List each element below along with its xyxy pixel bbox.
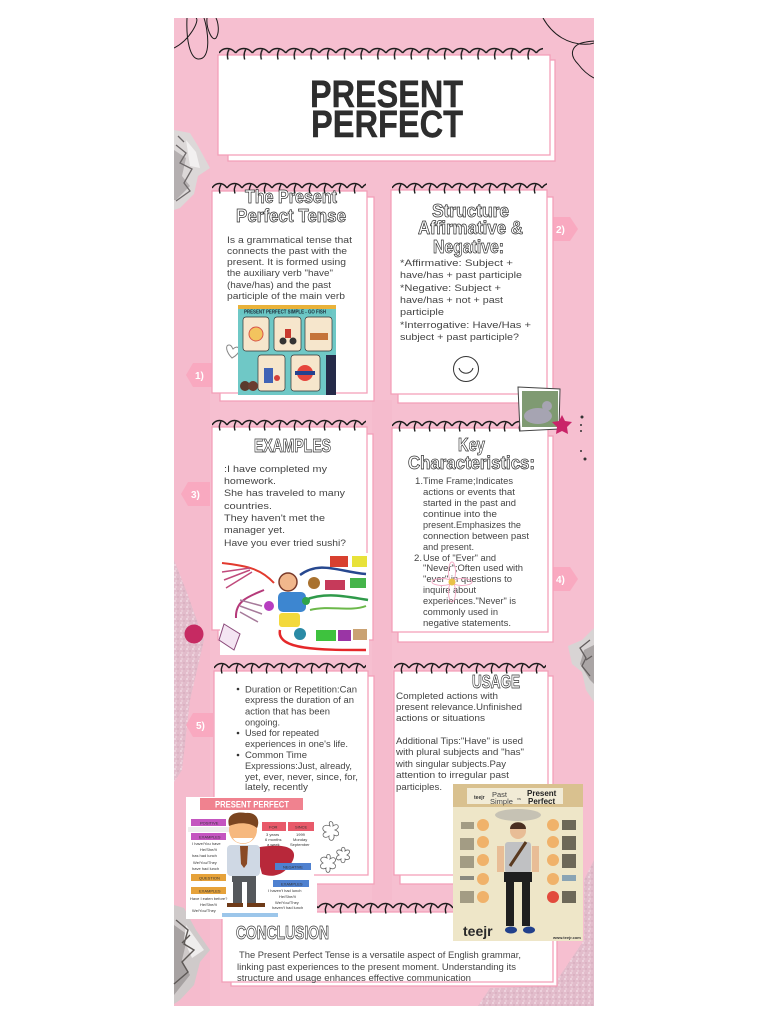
- text: definition: (have/has) and the past: [227, 280, 331, 291]
- text: example sentences: homework.: [224, 476, 276, 487]
- heading: key characteristics: Key: [458, 435, 485, 455]
- text: characteristics list: started in the past and: [423, 498, 516, 509]
- icon: smiley: [454, 356, 478, 382]
- tag: step 2: [547, 217, 578, 241]
- image: past simple vs present perfect chart: [453, 784, 583, 941]
- image: present perfect superhero chart: 3 years: [266, 832, 279, 837]
- tag: step 4: 4): [556, 575, 565, 586]
- text: duration bullets: yet, ever, never, since, for,: [245, 772, 358, 783]
- text: usage notes: [395, 691, 524, 793]
- text: characteristics list: and present.: [423, 542, 474, 553]
- image: present perfect superhero chart: a week: [267, 842, 280, 847]
- text: structure rules: have/has + not + past: [400, 295, 503, 306]
- text: definition: Is a grammatical tense that: [227, 235, 352, 246]
- image: present perfect superhero chart: 6 months: [265, 837, 281, 842]
- image: past simple vs present perfect chart: www.teejr.com: [552, 935, 581, 940]
- text: characteristics list: 1.: [415, 476, 423, 487]
- image: present perfect superhero chart: haven't had lunch: [272, 905, 303, 910]
- image: past simple vs present perfect chart: Past: [492, 790, 508, 799]
- panel: conclusion: [222, 902, 557, 986]
- tag: step 1: [186, 363, 212, 387]
- image: go fish game board: [238, 305, 336, 395]
- image: present perfect superhero chart: We/You/They: [192, 908, 216, 913]
- text: example sentences: countries.: [224, 501, 272, 512]
- text: duration bullets: Expressions:Just, already,: [245, 761, 352, 772]
- image: past simple vs present perfect chart: Present: [527, 789, 557, 798]
- image: past simple vs present perfect chart: vs: [517, 796, 521, 801]
- crumpled paper: lower left: [174, 905, 210, 1004]
- text: characteristics list: [414, 476, 529, 629]
- image: go fish game board: PRESENT PERFECT SIMPLE - GO FISH: [244, 310, 326, 316]
- coil binding: panel 2: [392, 182, 547, 195]
- text: example sentences: manager yet.: [224, 525, 285, 536]
- image: mind map: [219, 553, 369, 655]
- image: present perfect superhero chart: I haven't had lunch: [268, 888, 301, 893]
- text: conclusion body: The Present Perfect Tense is a versatile aspect of English grammar,: [239, 950, 521, 961]
- text: characteristics list: continue into the: [423, 509, 497, 520]
- panel: title card: [218, 47, 555, 161]
- coil binding: conclusion: [228, 902, 468, 915]
- image: past simple vs present perfect chart: Perfect: [528, 797, 555, 806]
- text: structure rules: *Affirmative: Subject +: [400, 258, 513, 269]
- icon: outlined flowers: [320, 822, 350, 872]
- text: duration bullets: Common Time: [245, 750, 307, 761]
- coil binding: panel 5: [214, 662, 366, 675]
- text: characteristics list: Use of "Ever" and: [423, 553, 496, 564]
- heading: the present perfect tense: Perfect Tense: [236, 206, 346, 226]
- image: past simple vs present perfect chart: teejr: [463, 923, 493, 939]
- image: present perfect superhero chart: EXAMPLES: [199, 888, 221, 894]
- tag: step 4: [547, 567, 578, 591]
- panel: examples: [212, 419, 373, 655]
- text: usage notes: Completed actions with: [396, 691, 498, 702]
- image: present perfect superhero chart: FOR: [269, 824, 278, 830]
- heading: examples: EXAMPLES: [254, 436, 331, 456]
- crumpled paper: upper left: [174, 130, 210, 210]
- text: definition: the auxiliary verb "have": [227, 268, 333, 279]
- text: definition: [227, 235, 352, 302]
- text: example sentences: :I have completed my: [224, 464, 327, 475]
- text: definition: participle of the main verb: [227, 291, 345, 302]
- tag: step 3: 3): [191, 490, 200, 501]
- image: present perfect superhero chart: PRESENT PERFECT: [215, 800, 289, 810]
- heading: usage: USAGE: [472, 672, 520, 692]
- image: present perfect superhero chart: NEGATIVE: [283, 864, 303, 870]
- panel: the present perfect tense: [212, 182, 374, 401]
- text: characteristics list: "Never";Often used with: [423, 563, 523, 574]
- text: characteristics list: negative statements.: [423, 618, 511, 629]
- text: example sentences: She has traveled to many: [224, 488, 345, 499]
- crumpled paper: right: [568, 628, 594, 702]
- image: present perfect superhero chart: Have I eaten before?: [190, 896, 228, 901]
- heading: structure: Affirmative &: [418, 218, 523, 238]
- text: usage notes: actions or situations: [396, 713, 485, 724]
- text: duration bullets: experiences in one's life.: [245, 739, 348, 750]
- text: structure rules: [400, 258, 531, 343]
- text: usage notes: participles.: [396, 782, 442, 793]
- heading: the present perfect tense: The Present: [245, 187, 337, 207]
- text: structure rules: have/has + past participle: [400, 270, 522, 281]
- text: structure rules: participle: [400, 307, 444, 318]
- text: characteristics list: 2.: [414, 553, 422, 564]
- image: present perfect superhero chart: He/She/It: [200, 902, 218, 907]
- text: characteristics list: commonly used in: [423, 607, 498, 618]
- image: past simple vs present perfect chart: Simple: [490, 797, 513, 806]
- text: characteristics list: present.Emphasizes the: [423, 520, 521, 531]
- text: usage notes: Additional Tips:"Have" is used: [396, 736, 523, 747]
- text: definition: connects the past with the: [227, 246, 347, 257]
- title: PRESENT: [310, 74, 463, 116]
- heading: key characteristics: [408, 435, 535, 473]
- image: present perfect superhero chart: SINCE: [295, 824, 308, 830]
- text: structure rules: *Interrogative: Have/Has +: [400, 320, 531, 331]
- text: example sentences: They haven't met the: [224, 513, 325, 524]
- text: usage notes: attention to irregular past: [396, 770, 509, 781]
- decorative marks: right dots: [580, 416, 586, 460]
- image: present perfect superhero chart: He/She/It: [200, 847, 218, 852]
- image: present perfect superhero chart: has had lunch: [192, 853, 217, 858]
- scribble: top right: [543, 18, 596, 78]
- tag: step 3: [181, 482, 210, 506]
- text: duration bullets: Used for repeated: [245, 728, 319, 739]
- text: duration bullets: lately, recently: [245, 782, 308, 793]
- text: definition: present. It is formed using: [227, 257, 346, 268]
- icon: pink daisy: [432, 562, 472, 602]
- heading: structure: Structure: [432, 201, 509, 221]
- coil binding: title card: [219, 47, 543, 61]
- text: characteristics list: actions or events that: [423, 487, 515, 498]
- text: characteristics list: connection between past: [423, 531, 529, 542]
- text: usage notes: with singular subjects.Pay: [395, 759, 506, 770]
- image: present perfect superhero chart: September: [290, 842, 310, 847]
- glitter decoration: left: [174, 560, 204, 782]
- image: present perfect superhero chart: QUESTION: [199, 876, 220, 880]
- title: [310, 74, 463, 146]
- text: characteristics list: experiences."Never" is: [423, 596, 516, 607]
- coil binding: panel 4: [392, 420, 522, 433]
- image: present perfect superhero chart: POSITIVE: [200, 820, 219, 826]
- text: characteristics list: Time Frame;Indicates: [423, 476, 513, 487]
- heading: conclusion: CONCLUSION: [236, 923, 329, 943]
- coil binding: panel 6: [394, 662, 546, 675]
- image: present perfect superhero chart: have had lunch: [192, 866, 219, 871]
- image: rabbit photo with star: [518, 387, 572, 434]
- text: conclusion body: linking past experiences to the present moment. Understanding its: [237, 962, 516, 973]
- text: conclusion body: [237, 950, 521, 984]
- image: present perfect superhero chart: We/You/They: [275, 900, 299, 905]
- title: PERFECT: [311, 104, 463, 146]
- image: past simple vs present perfect chart: teejr: [474, 795, 485, 801]
- image: present perfect superhero chart: EXAMPLES: [281, 882, 303, 886]
- image: present perfect superhero chart: [186, 797, 317, 919]
- text: duration bullets: ongoing.: [245, 718, 280, 728]
- text: duration bullets: express the duration of an: [245, 695, 354, 706]
- image: present perfect superhero chart: Monday: [293, 837, 307, 842]
- image: present perfect superhero chart: 1999: [296, 832, 306, 837]
- tag: step 2: 2): [556, 225, 565, 236]
- heading: structure: [418, 201, 523, 257]
- text: characteristics list: "ever" in questions to: [423, 574, 512, 585]
- tag: step 5: 5): [196, 721, 205, 732]
- text: example sentences: Have you ever tried sushi?: [224, 538, 346, 549]
- image: present perfect superhero chart: I have/You have: [192, 841, 221, 846]
- tag: step 5: [186, 713, 213, 737]
- text: structure rules: subject + past participle?: [400, 332, 519, 343]
- scribble: top left: [174, 18, 218, 59]
- glitter decoration: bottom right: [478, 860, 594, 1006]
- text: duration bullets: Duration or Repetition:Can: [245, 684, 357, 696]
- text: duration bullets: action that has been: [245, 706, 330, 718]
- text: duration bullets: [237, 684, 358, 793]
- coil binding: panel 3: [212, 419, 366, 432]
- text: structure rules: *Negative: Subject +: [400, 283, 501, 294]
- coil binding: panel 1: [212, 182, 366, 195]
- panel: duration and common time expressions: [214, 662, 374, 884]
- image: present perfect superhero chart: We/You/They: [193, 860, 217, 865]
- icon: heart doodle: [227, 345, 239, 358]
- tag: step 1: 1): [195, 371, 204, 382]
- text: usage notes: with plural subjects and "has": [395, 747, 524, 758]
- icon: magenta flower: [184, 624, 204, 644]
- text: conclusion body: structure and usage enhances effective communication: [237, 973, 471, 984]
- image: present perfect superhero chart: He/She/It: [279, 894, 297, 899]
- text: usage notes: present relevance.Unfinished: [396, 702, 522, 713]
- text: characteristics list: inquire about: [423, 585, 476, 596]
- panel: structure affirmative and negative: [391, 182, 553, 403]
- heading: the present perfect tense: [236, 187, 346, 226]
- image: present perfect superhero chart: EXAMPLES: [199, 834, 221, 840]
- heading: key characteristics: Characteristics:: [408, 453, 535, 473]
- poster background: [174, 18, 594, 1006]
- panel: key characteristics: [392, 420, 553, 642]
- text: example sentences: [224, 464, 346, 549]
- heading: structure: Negative:: [433, 237, 504, 257]
- panel: usage: [394, 662, 553, 884]
